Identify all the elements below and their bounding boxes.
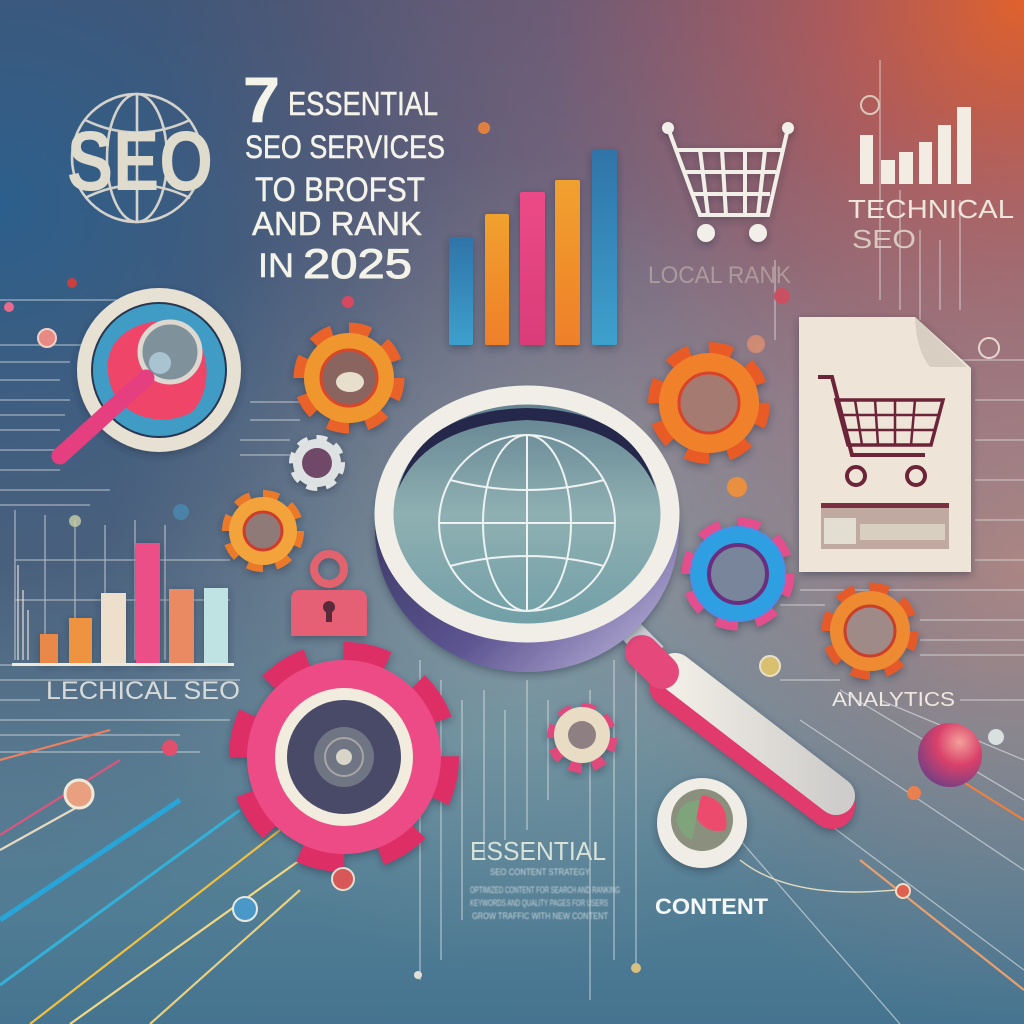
icon: target with magnifier bbox=[60, 288, 241, 456]
label: technical seo: SEO bbox=[852, 224, 916, 254]
icon: shopping cart top bbox=[664, 124, 792, 240]
title: 7 bbox=[243, 64, 280, 136]
magnifier handle bbox=[620, 620, 836, 806]
label: analytics: ANALYTICS bbox=[832, 689, 955, 711]
text block: essential: KEYWORDS AND QUALITY PAGES FOR USERS bbox=[470, 898, 608, 909]
text block: essential: GROW TRAFFIC WITH NEW CONTENT bbox=[472, 911, 608, 922]
gear: orange lower right bbox=[828, 589, 912, 673]
title: IN bbox=[258, 247, 294, 285]
title: 2025 bbox=[303, 240, 412, 287]
text block: essential: OPTIMIZED CONTENT FOR SEARCH AND RANKING bbox=[470, 885, 620, 896]
gear: small center bbox=[552, 707, 612, 768]
bar chart: center bbox=[449, 150, 617, 345]
text block: essential: SEO CONTENT STRATEGY bbox=[490, 867, 591, 878]
icon: document with cart bbox=[799, 317, 971, 572]
title bbox=[243, 64, 445, 287]
label: local rank: LOCAL RANK bbox=[648, 262, 791, 289]
text block: essential: ESSENTIAL bbox=[470, 836, 606, 866]
bar chart: top right bbox=[860, 107, 971, 184]
title: AND RANK bbox=[252, 205, 422, 242]
title: ESSENTIAL bbox=[288, 85, 438, 122]
label: technical seo: TECHNICAL bbox=[848, 194, 1014, 224]
gear: blue bbox=[690, 526, 786, 622]
bar chart: left bbox=[12, 543, 234, 666]
icon: sphere bbox=[918, 723, 982, 787]
title: SEO SERVICES bbox=[245, 129, 445, 165]
text block: essential bbox=[470, 836, 620, 922]
gear: orange top-left bbox=[302, 331, 396, 425]
title: TO BROFST bbox=[255, 171, 425, 209]
gear: big pink bbox=[244, 657, 444, 857]
globe bbox=[439, 435, 615, 611]
icon: large magnifying glass bbox=[375, 388, 836, 806]
label: technical seo bbox=[848, 194, 1014, 254]
gear: small orange bbox=[228, 496, 298, 566]
icon: padlock bbox=[291, 554, 367, 636]
icon: SEO globe: SEO bbox=[67, 114, 213, 208]
icon: SEO globe bbox=[67, 94, 213, 222]
label: lechical seo: LECHICAL SEO bbox=[46, 677, 240, 705]
icon: color circle bbox=[657, 778, 747, 868]
gear: small gray bbox=[293, 439, 341, 487]
gear: orange right bbox=[657, 351, 761, 455]
label: content: CONTENT bbox=[655, 894, 769, 919]
